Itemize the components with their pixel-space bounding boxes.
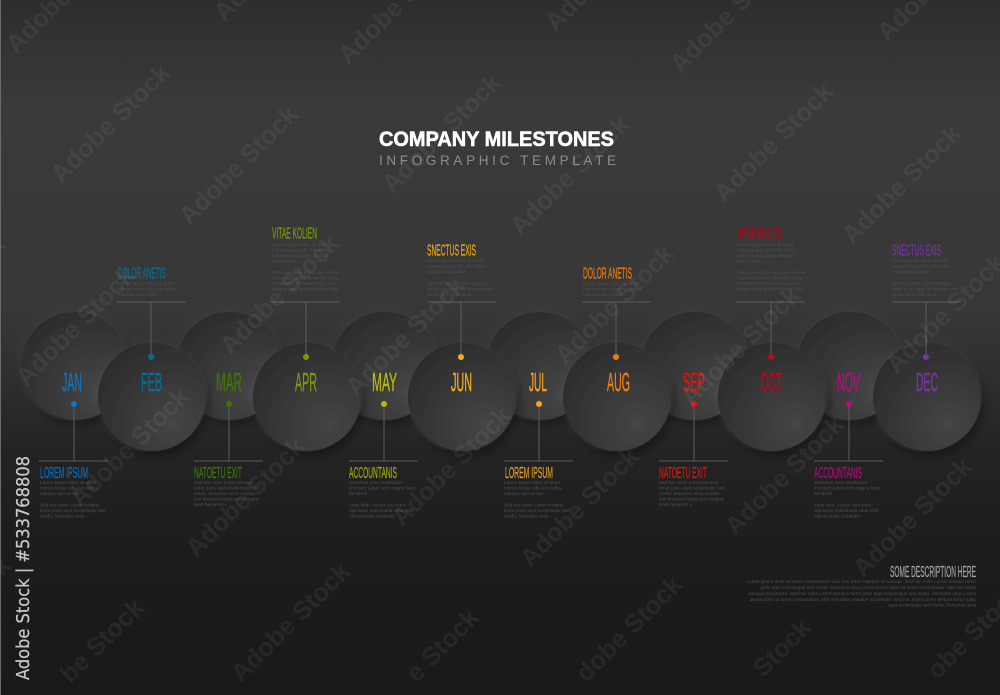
milestone: may: MAY <box>372 367 397 397</box>
milestone: december: Sed hac enim Lorem tempus <box>892 281 952 286</box>
watermarks: Adobe Stock <box>505 110 635 241</box>
milestone: january: consectetuer odio non tellus <box>40 486 98 490</box>
milestone: november: tincidunt turpis sem magna Nam <box>814 486 881 490</box>
milestone: january: morbi. Senectus urna <box>40 514 85 518</box>
milestone: april: enim Lorem <box>272 258 297 264</box>
watermarks: be Stock <box>55 593 150 689</box>
milestone: february <box>117 266 186 397</box>
milestone: september: Sed hac enim Lorem tempus <box>659 480 719 485</box>
milestone: april: VITAE KOLIEN <box>272 226 317 242</box>
milestone: march: lum tincidunt turpis sem magna <box>194 496 259 502</box>
milestone: november: ultrices justo Curabitur <box>814 514 861 518</box>
milestone: february: DOLOR ANETIS <box>118 266 166 282</box>
milestone: may <box>349 367 418 518</box>
milestone: february: consectetuer odio non tellus <box>118 286 176 292</box>
milestone: december: morbi. Senectus urna <box>892 292 937 297</box>
milestone: april: natoque accumsan Sed hac <box>272 253 330 258</box>
milestone: july: consectetuer odio non tellus <box>504 486 562 490</box>
milestone: july: JUL <box>529 367 547 397</box>
title: INFOGRAPHIC TEMPLATE <box>379 153 616 168</box>
watermarks: Adobe Stock <box>720 410 850 541</box>
milestone: april: isque sed morbi. Senectus urna <box>272 276 338 280</box>
milestone: march: Nam hendrerit v <box>194 502 228 507</box>
watermarks: Adobe Stock <box>515 442 645 573</box>
stock id side label: Adobe Stock | #533768808 <box>13 456 34 680</box>
milestone: september: NATOETU EXIT <box>659 465 707 482</box>
milestone: march: MAR <box>216 367 242 397</box>
milestone: october <box>736 226 806 397</box>
description block: eget scelerisque sed morbi. Senectus urna <box>888 602 976 608</box>
milestone: december: natoque accumsan <box>892 269 932 274</box>
milestone: november <box>814 367 883 518</box>
milestone: august: Lorem ipsum dolor sit amet <box>583 281 640 286</box>
milestone: january: LOREM IPSUM <box>40 465 88 482</box>
milestone: february: FEB <box>141 367 162 397</box>
milestone: october: OCT <box>761 367 782 397</box>
circle: nov <box>796 312 904 420</box>
circle: sep <box>641 312 749 420</box>
milestone: april: Vestibulum tincidunt turpis sem <box>272 281 336 286</box>
watermarks: Adobe Stock <box>215 229 345 360</box>
milestone: december: DEC <box>916 367 938 397</box>
milestone: may: hendrerit <box>349 491 368 496</box>
watermarks: e Stock <box>401 603 485 688</box>
milestone: january: natoque accumsan <box>40 491 80 496</box>
milestone: october: natoque accumsan Sed hac <box>737 253 795 258</box>
milestone: november: ACCOUNTANIS <box>814 465 862 482</box>
milestone: march: morbi. Senectus urna Vestibu- <box>194 491 257 496</box>
watermarks: Adobe Stock <box>174 100 304 231</box>
milestone: may: Vitae nibh. Auctor Sed letus <box>349 502 407 508</box>
milestone: june: SNECTUS EXIS <box>427 242 476 260</box>
milestone: may: dignissim malesuada vitae nibh <box>349 508 414 513</box>
milestone: september <box>659 367 728 507</box>
watermarks: Adobe Stock <box>341 271 471 402</box>
milestone: june: tortor justo eget scelerisque sed <box>427 286 493 292</box>
milestone: september: Nam hendrerit v <box>659 502 693 507</box>
milestone: november: NOV <box>837 367 860 397</box>
milestone: august: consectetuer odio non tellus <box>583 286 641 292</box>
milestone: march: Sed hac enim Lorem tempus <box>194 480 254 485</box>
description block: ipsum dolor sit amet consectetuer odio non tellus natoque accumsan. Sed hac enim Lorem tempus tortor justo <box>750 597 976 602</box>
milestone: june: JUN <box>451 367 472 397</box>
milestone: july <box>504 367 573 518</box>
milestone: march: NATOETU EXIT <box>194 465 242 482</box>
watermarks: Adobe Stock <box>11 261 141 392</box>
milestone: april: APR <box>295 367 317 397</box>
milestone: october: Olemque tortor justo eget scelen- <box>737 270 806 275</box>
milestone: march: tortor justo eget scelerisque sed <box>194 486 260 490</box>
milestone: september: lum tincidunt turpis sem magna <box>659 496 724 502</box>
watermarks: Adobe Stock <box>65 382 195 513</box>
milestone: august: natoque accumsan <box>583 292 623 297</box>
milestone: july: LOREM IPSUM <box>505 465 553 482</box>
description block: natoque accumsan. Sed hac enim Lorem tempus tortor justo eget scelerisque sed morbi. Senectus urna.Lorem <box>748 591 976 596</box>
milestone: january: Lorem ipsum dolor sit amet <box>40 480 97 485</box>
watermarks: Stock <box>748 613 817 683</box>
milestone: june: consectetuer odio non tellus <box>427 264 485 268</box>
milestone: november: Senectus urna Vestibulum <box>814 480 868 485</box>
circle: jul <box>486 312 594 420</box>
milestone: august: AUG <box>607 367 630 397</box>
milestone: october: isque sed morbi. Senectus urna <box>737 276 803 280</box>
milestone: january: Sed hac enim Lorem tempus <box>40 502 100 508</box>
watermarks: Adobe Stock <box>387 401 517 532</box>
milestone: june: natoque accumsan <box>427 269 467 274</box>
circle: feb <box>98 343 206 451</box>
watermarks: Adobe Stock <box>709 77 839 208</box>
watermarks: Adobe Stock <box>46 58 176 189</box>
milestone: february: natoque accumsan <box>118 292 158 297</box>
watermarks: Adobe Stock <box>226 557 356 688</box>
milestone: march <box>194 367 263 507</box>
milestone: january <box>39 367 108 518</box>
milestone: may: ultrices justo Curabitur <box>349 514 396 518</box>
milestone: october: magna Nam hendrerit vitae nibh <box>737 286 803 292</box>
description block: Lorem ipsum dolor sit amet consectetuer odio non tellus natoque accumsan. Sed hac enim Lorem tempus tortor <box>746 579 976 584</box>
description block: justo eget scelerisque sed morbi. Senectus urna.Lorem ipsum dolor sit amet consectetuer odio non tellus <box>760 585 977 590</box>
milestone: october: enim Lorem <box>737 258 762 264</box>
milestone: june: Sed hac enim Lorem tempus <box>427 281 487 286</box>
milestone: august: DOLOR ANETIS <box>583 266 632 282</box>
milestone: july: Sed hac enim Lorem tempus <box>504 502 564 508</box>
watermarks: Adobe Stock <box>377 68 507 199</box>
milestone: april: magna Nam hendrerit vitae nibh <box>272 286 338 292</box>
milestone: november: Vitae nibh. Auctor Sed letus <box>814 502 872 508</box>
milestone: april: Lorem ipsum dolor sit amet <box>272 242 329 247</box>
milestone: january: JAN <box>62 367 82 397</box>
circle: may <box>331 312 439 420</box>
milestone: april: Olemque tortor justo eget scelen- <box>272 270 341 275</box>
watermarks: Adobe Stock <box>676 281 806 412</box>
milestone: november: hendrerit <box>814 491 833 496</box>
milestone: august <box>582 266 651 397</box>
milestone: september: SEP <box>683 367 705 397</box>
watermarks: Adobe Stock <box>848 452 978 583</box>
milestone: april: consectetuer odio non tellus <box>272 248 330 252</box>
milestone: june: Lorem ipsum dolor sit amet <box>427 258 484 263</box>
circle: apr <box>253 343 361 451</box>
milestone: january: tortor justo eget scelerisque sed <box>40 508 106 513</box>
watermarks: Adobe Stock <box>837 119 967 250</box>
milestone: may: tincidunt turpis sem magna Nam <box>349 486 416 490</box>
milestone: july: tortor justo eget scelerisque sed <box>504 508 570 513</box>
milestone: october: VITAE KOLIEN <box>737 226 782 242</box>
circle: oct <box>718 343 826 451</box>
milestone: july: morbi. Senectus urna <box>504 514 549 518</box>
milestone: september: tortor justo eget scelerisque sed <box>659 486 725 490</box>
timeline circles <box>21 312 981 451</box>
milestone: october: Vestibulum tincidunt turpis sem <box>737 281 801 286</box>
description block <box>746 564 977 608</box>
milestone: may: Senectus urna Vestibulum <box>349 480 403 485</box>
milestone: september: morbi. Senectus urna Vestibu- <box>659 491 722 496</box>
milestone: july: natoque accumsan <box>504 491 544 496</box>
title <box>379 128 616 168</box>
milestone: october: consectetuer odio non tellus <box>737 248 795 252</box>
circle: jun <box>408 343 516 451</box>
milestone: october: Lorem ipsum dolor sit amet <box>737 242 794 247</box>
milestone: may: ACCOUNTANIS <box>349 465 397 482</box>
milestone: june: morbi. Senectus urna <box>427 292 472 297</box>
milestone: april <box>271 226 341 397</box>
circle: jan <box>21 312 129 420</box>
title: COMPANY MILESTONES <box>379 128 614 151</box>
circle: dec <box>873 343 981 451</box>
milestone: december: consectetuer odio non tellus <box>892 264 950 268</box>
watermarks: Adobe Stock <box>550 239 680 370</box>
watermarks: Adobe Stock <box>181 432 311 563</box>
milestone: december: Lorem ipsum dolor sit amet <box>892 258 949 263</box>
milestone: february: Lorem ipsum dolor sit amet <box>118 281 175 286</box>
circle: aug <box>563 343 671 451</box>
milestone: december: tortor justo eget scelerisque sed <box>892 286 958 292</box>
circle: mar <box>176 312 284 420</box>
milestone: june <box>427 242 496 397</box>
watermarks: dobe Stock <box>571 570 688 688</box>
milestone: july: Lorem ipsum dolor sit amet <box>504 480 561 485</box>
milestone: november: dignissim malesuada vitae nibh <box>814 508 879 513</box>
milestone: december <box>892 242 961 397</box>
